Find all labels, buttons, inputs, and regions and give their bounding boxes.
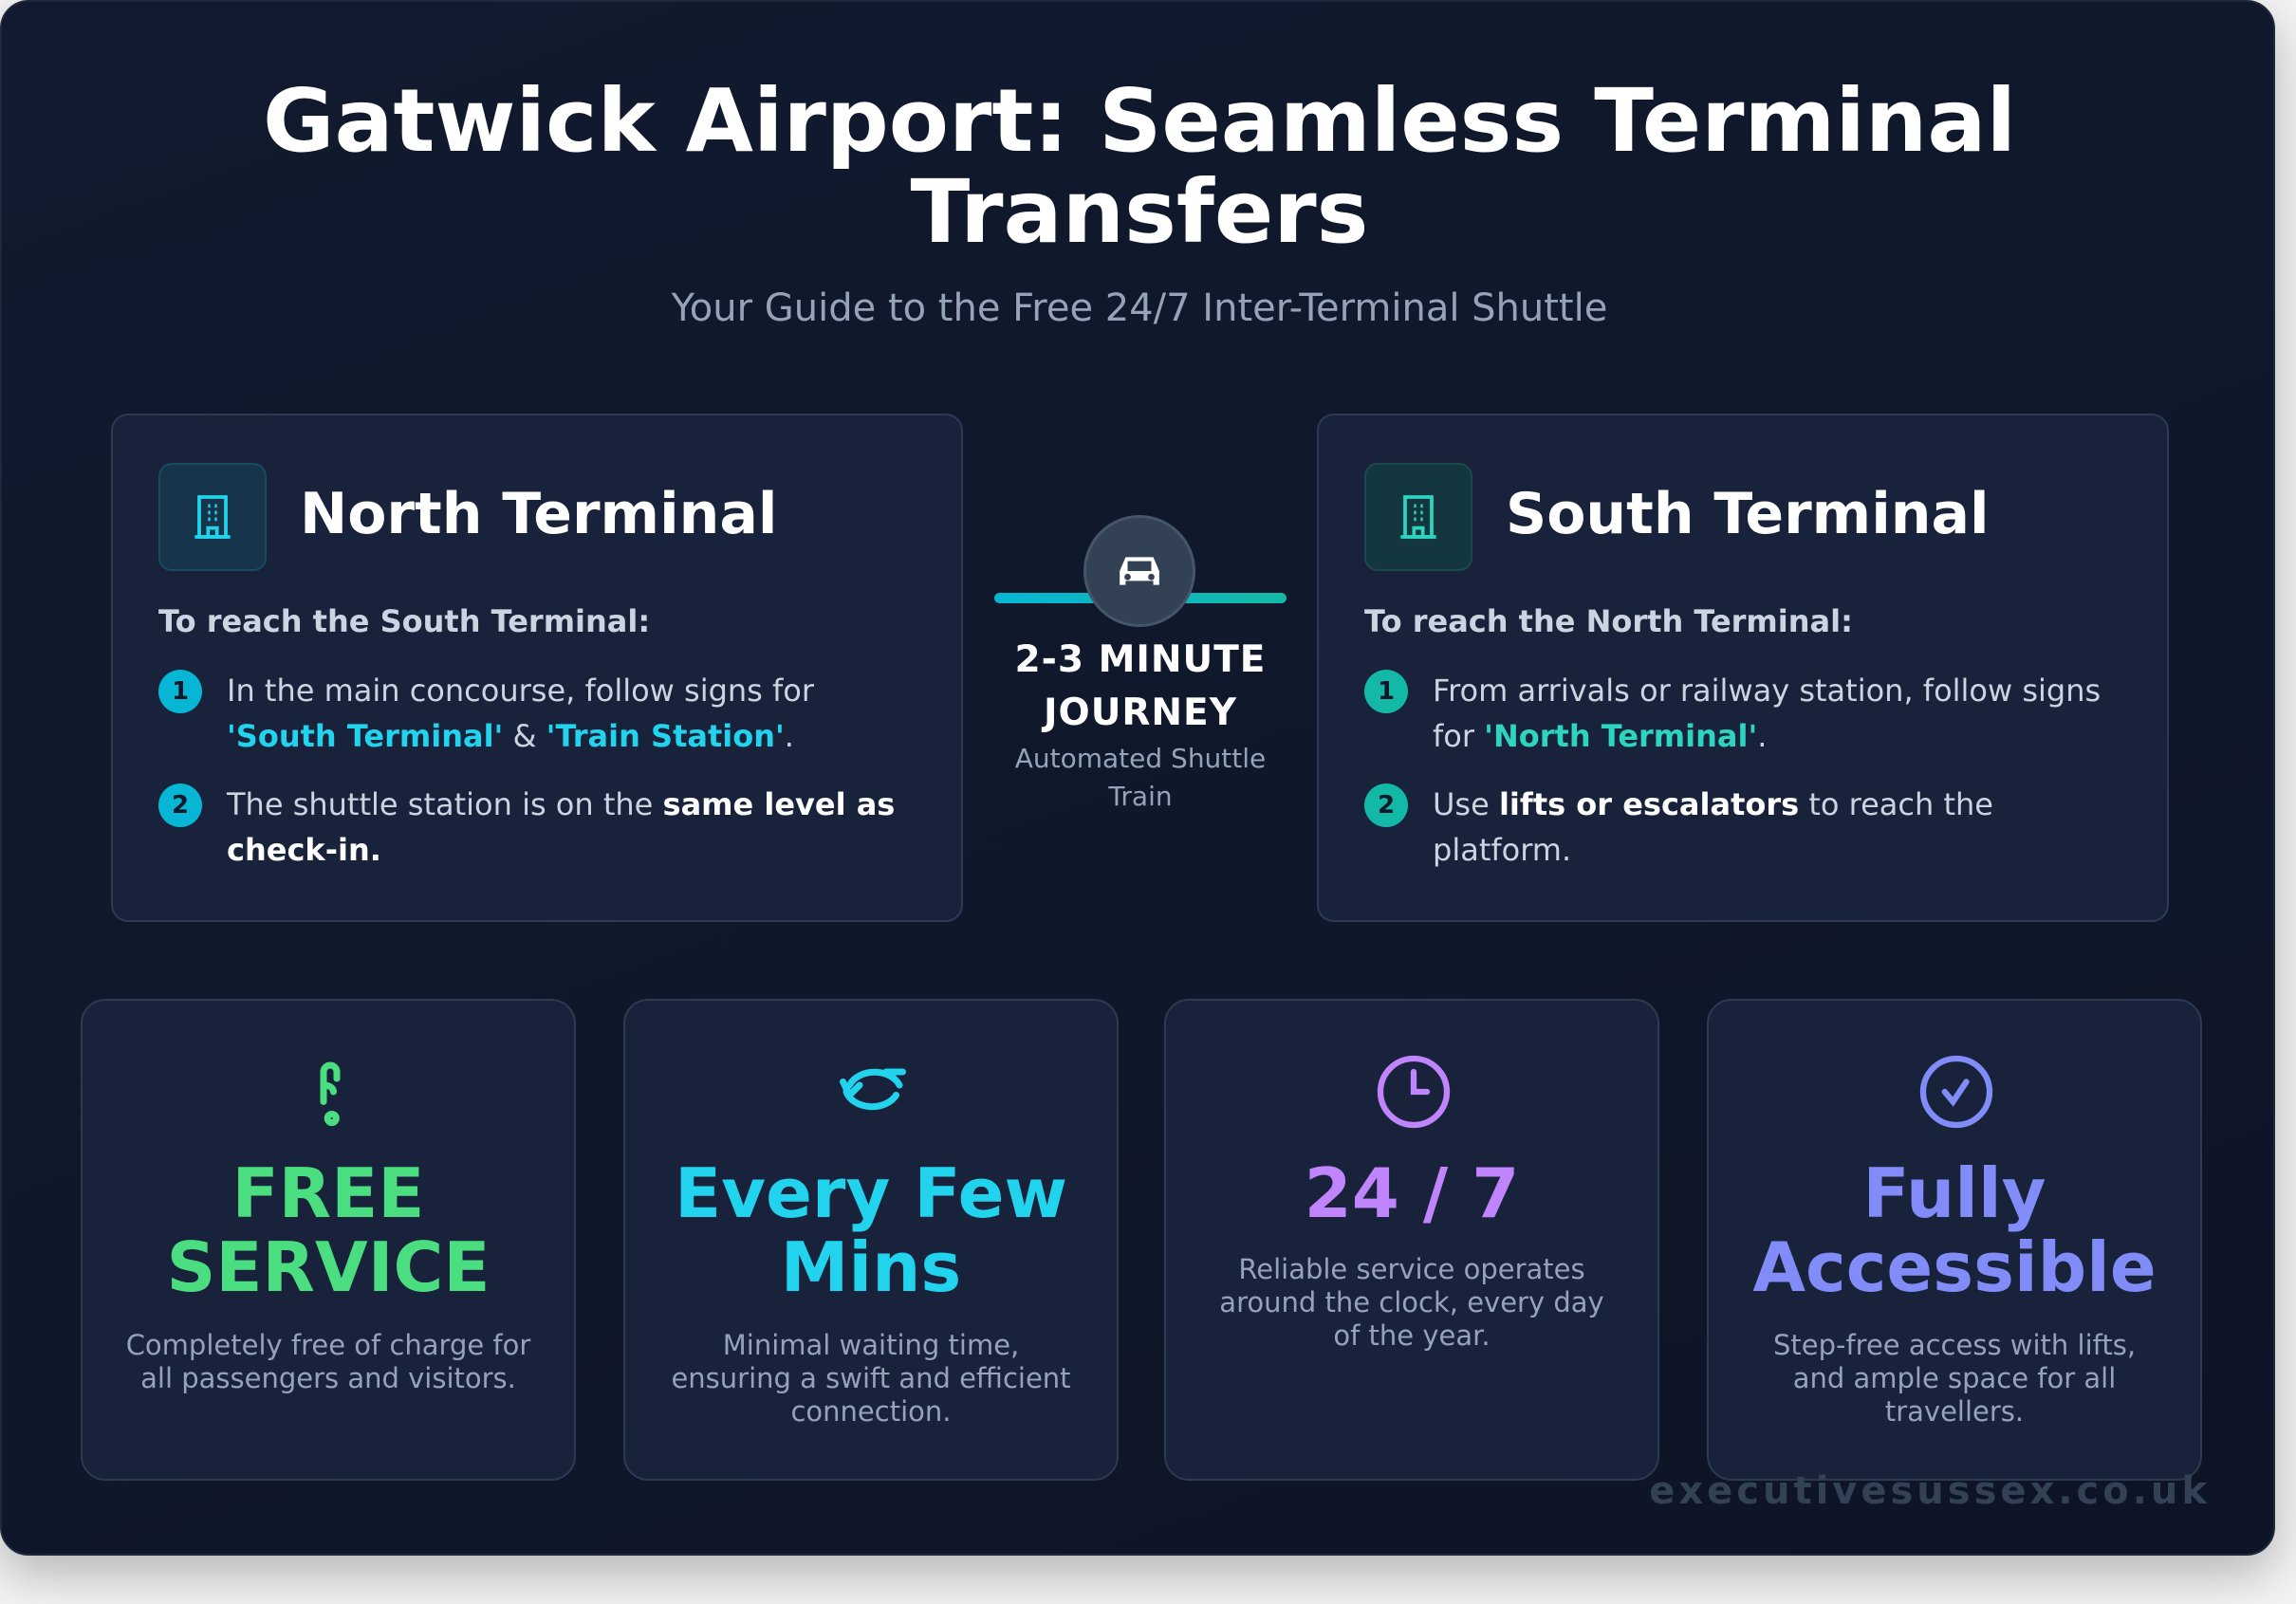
subheading: To reach the North Terminal: — [1364, 603, 1853, 639]
step 1: From arrivals or railway station, follow signs — [1433, 673, 2101, 709]
title: Transfers — [911, 161, 1368, 263]
journey text — [1015, 638, 1266, 812]
card: accessible — [1707, 999, 2202, 1481]
step 1: In the main concourse, follow signs for — [227, 673, 814, 709]
description: connection. — [790, 1395, 951, 1428]
step 2: The shuttle station is on the same level as — [227, 786, 895, 822]
heading — [1752, 1153, 2157, 1307]
description: travellers. — [1885, 1395, 2024, 1428]
subtitle: Your Guide to the Free 24/7 Inter-Terminal Shuttle — [672, 286, 1607, 330]
journey text: Automated Shuttle — [1015, 743, 1266, 774]
description: Completely free of charge for — [126, 1329, 530, 1361]
step 2: 2 — [1378, 791, 1395, 820]
heading: Every Few — [675, 1153, 1067, 1233]
title: Gatwick Airport: Seamless Terminal — [263, 70, 2016, 172]
icon: repeat — [840, 1068, 906, 1110]
heading: North Terminal — [300, 481, 777, 547]
icon: check circle — [1920, 1055, 1992, 1129]
heading: Accessible — [1752, 1227, 2157, 1307]
description: ensuring a swift and efficient — [671, 1362, 1071, 1394]
description — [1219, 1253, 1604, 1352]
description: and ample space for all — [1793, 1362, 2116, 1394]
journey text: 2-3 MINUTE — [1015, 638, 1266, 681]
description — [126, 1329, 531, 1394]
icon: building — [1364, 463, 1472, 571]
icon: free — [321, 1062, 340, 1126]
title — [263, 70, 2016, 263]
description: all passengers and visitors. — [140, 1362, 516, 1394]
step 2 — [1364, 784, 1993, 868]
step 1 — [1364, 670, 2101, 754]
description: Minimal waiting time, — [723, 1329, 1019, 1361]
panel: north terminal — [111, 414, 963, 922]
step 2: Use lifts or escalators to reach the — [1433, 786, 1993, 822]
subheading: To reach the South Terminal: — [158, 603, 650, 639]
step 2: platform. — [1433, 832, 1571, 868]
card: free service — [81, 999, 576, 1481]
heading: FREE — [231, 1153, 425, 1233]
journey text: JOURNEY — [1044, 691, 1237, 734]
card: frequency — [623, 999, 1119, 1481]
heading: South Terminal — [1506, 481, 1990, 547]
step 1 — [158, 670, 814, 754]
description: Reliable service operates — [1238, 1253, 1585, 1285]
card: 24/7 — [1164, 999, 1659, 1481]
heading: Fully — [1862, 1153, 2046, 1233]
panel: south terminal — [1317, 414, 2169, 922]
step 1: 'South Terminal' & 'Train Station'. — [227, 718, 794, 754]
heading — [675, 1153, 1067, 1307]
heading: Mins — [781, 1227, 961, 1307]
journey text: Train — [1108, 781, 1173, 812]
description: Step-free access with lifts, — [1773, 1329, 2136, 1361]
description — [1773, 1329, 2136, 1428]
description: of the year. — [1333, 1319, 1491, 1352]
heading: 24 / 7 — [1305, 1153, 1519, 1233]
description: around the clock, every day — [1219, 1286, 1604, 1318]
watermark: executivesussex.co.uk — [1649, 1469, 2211, 1513]
connector: shuttle journey — [994, 515, 1287, 812]
step 2: check-in. — [227, 832, 381, 868]
icon: shuttle — [1083, 515, 1195, 627]
step 2: 2 — [172, 791, 189, 820]
step 1: 1 — [172, 677, 189, 706]
heading: SERVICE — [166, 1227, 490, 1307]
icon: building — [158, 463, 267, 571]
track line — [994, 593, 1287, 603]
step 1: for 'North Terminal'. — [1433, 718, 1767, 754]
heading — [166, 1153, 490, 1307]
step 1: 1 — [1378, 677, 1395, 706]
description — [671, 1329, 1071, 1428]
icon: clock — [1378, 1055, 1450, 1129]
step 2 — [158, 784, 895, 868]
